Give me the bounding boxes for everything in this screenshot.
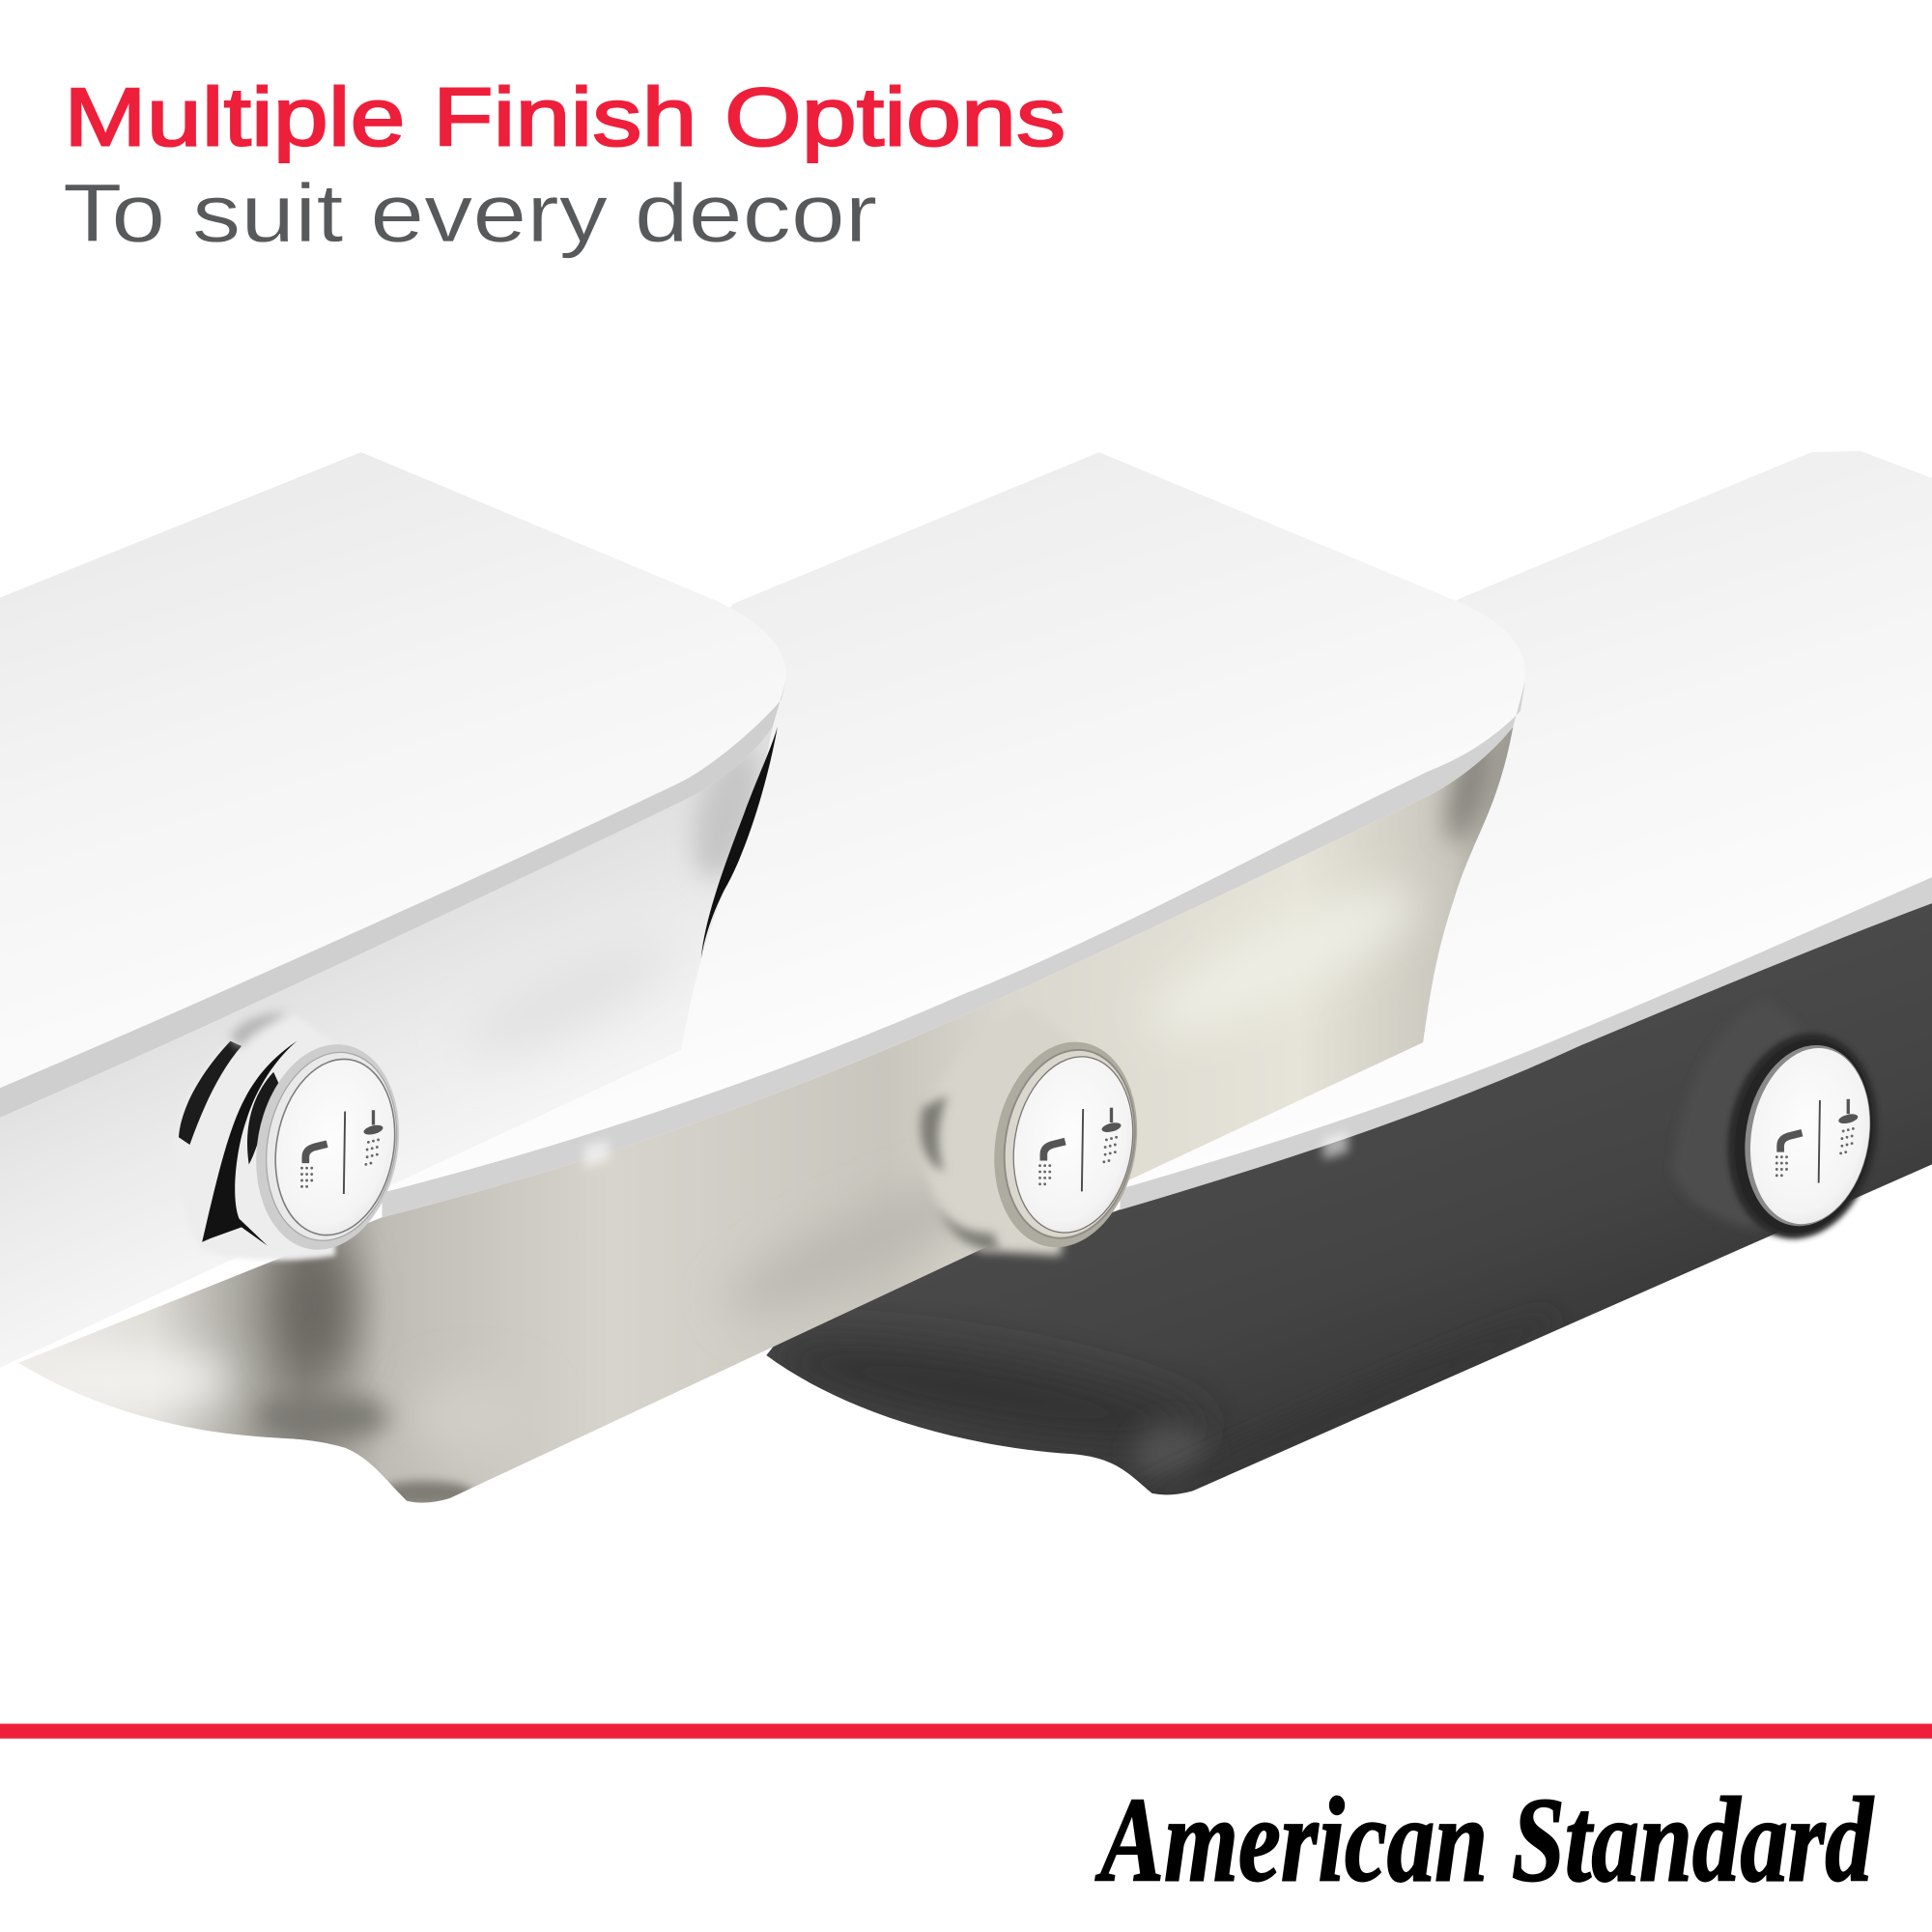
edge highlight xyxy=(1323,1131,1348,1159)
control knob: polished chrome xyxy=(175,1009,414,1262)
black unit top plate xyxy=(985,451,1932,1213)
chrome unit top plate xyxy=(0,452,786,1088)
chrome reflection sliver xyxy=(701,727,778,958)
red divider line xyxy=(0,1723,1932,1739)
control knob: black xyxy=(1672,999,1893,1251)
edge highlight xyxy=(584,1140,609,1168)
product: brushed nickel finish unit xyxy=(18,452,1525,1506)
black unit glass edge band xyxy=(1120,877,1932,1210)
nickel knob flare xyxy=(920,1007,1073,1256)
nickel unit body xyxy=(18,727,1513,1503)
nickel unit top plate xyxy=(345,452,1525,1193)
chrome unit body shading xyxy=(508,752,763,1037)
black unit body xyxy=(766,903,1932,1494)
control knob: brushed nickel xyxy=(920,1007,1152,1259)
product: matte black finish unit xyxy=(761,451,1932,1528)
chrome knob flare xyxy=(175,1009,335,1261)
nickel unit glass edge band xyxy=(382,680,1525,1217)
nickel unit body shading xyxy=(37,730,1500,1506)
product: polished chrome finish unit xyxy=(0,452,786,1368)
subtitle: To suit every decor: To suit every decor xyxy=(63,168,877,260)
chrome unit body xyxy=(0,727,773,1368)
black knob flare xyxy=(1672,999,1798,1235)
knob icons: spout and shower xyxy=(300,1110,384,1194)
black unit body shading xyxy=(767,1330,1544,1495)
chrome unit glass edge band xyxy=(0,680,786,1118)
title: Multiple Finish Options: Multiple Finish Options xyxy=(64,72,1065,164)
